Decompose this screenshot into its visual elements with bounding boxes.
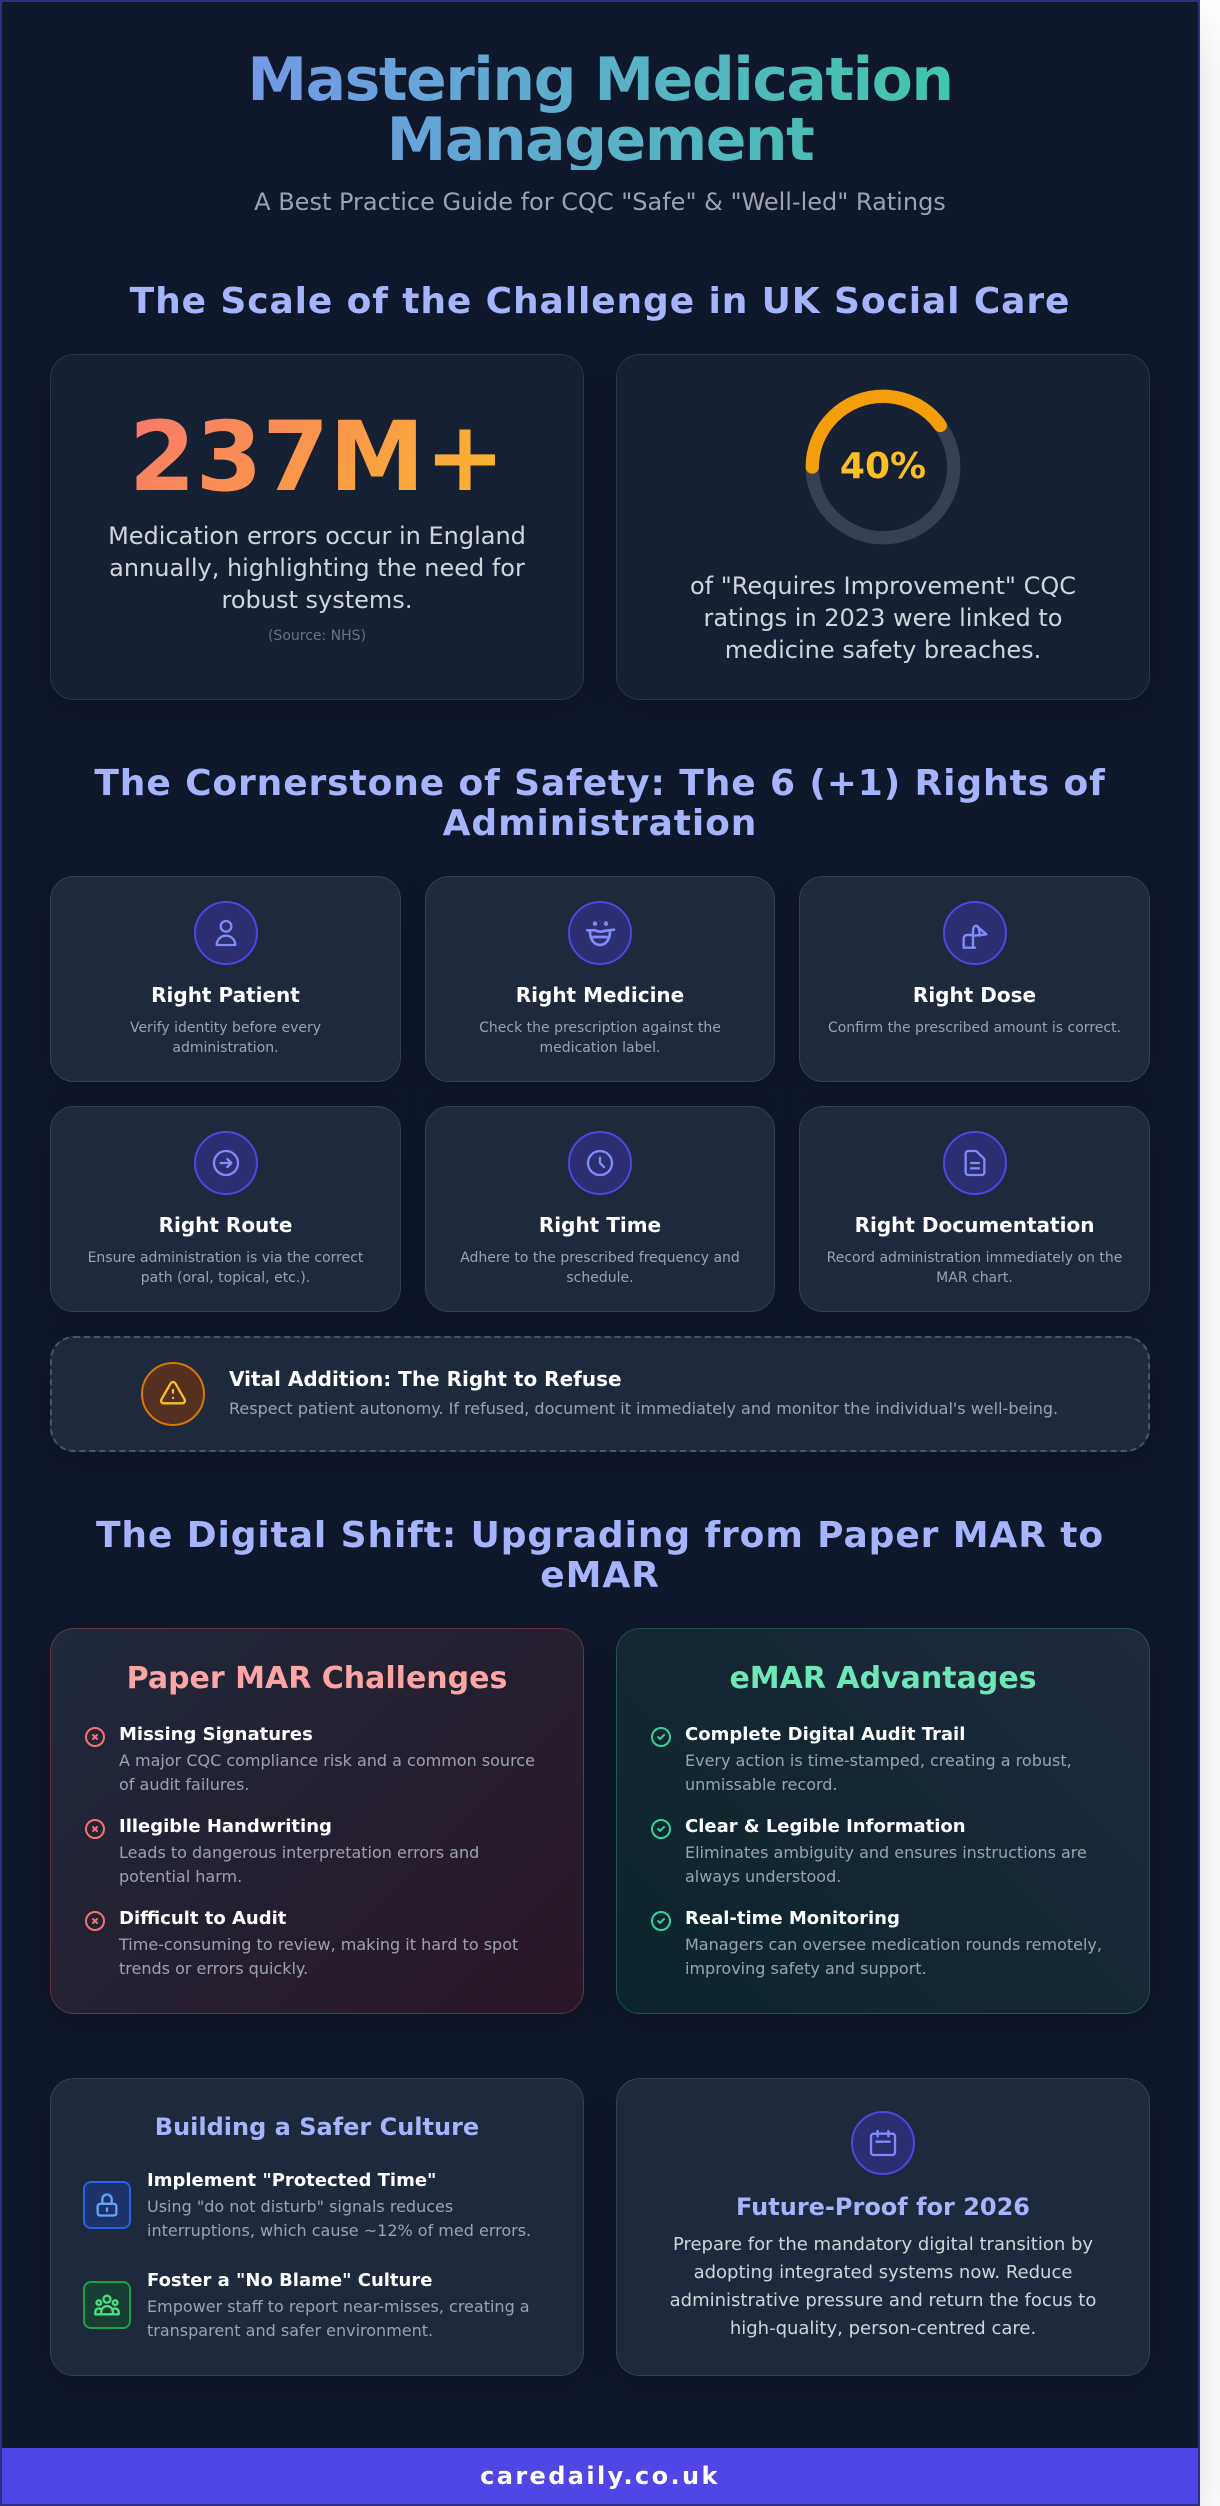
item: difficult to audit <box>85 1908 518 1978</box>
heading: scale of the challenge: The Scale of the Challenge in UK Social Care <box>130 281 1070 322</box>
title: Management <box>387 105 813 175</box>
panel: 237M+ statistic <box>50 354 584 700</box>
stat description: Medication errors occur in England annually, highlighting the need for robust systems. <box>108 522 526 614</box>
panel heading: Paper MAR Challenges <box>127 1661 507 1696</box>
callout: right to refuse <box>50 1336 1150 1452</box>
icon: lock <box>83 2181 131 2229</box>
item: no blame culture: Foster a "No Blame" Culture <box>147 2270 432 2291</box>
stat description: of "Requires Improvement" CQC ratings in 2023 were linked to medicine safety breaches. <box>690 572 1076 664</box>
card: right medicine: Right Medicine <box>516 983 684 1007</box>
panel: safer culture <box>50 2078 584 2376</box>
card: right route <box>50 1106 401 1312</box>
donut chart 40% <box>806 390 960 544</box>
item: real-time monitoring <box>651 1908 1102 1978</box>
source: (Source: NHS) <box>268 628 366 644</box>
item: real-time monitoring: Real-time Monitoring <box>685 1908 900 1929</box>
icon: dose <box>942 901 1006 965</box>
panel: paper MAR challenges <box>50 1628 584 2014</box>
item: real-time monitoring: Managers can oversee medication rounds remotely, improving safety and support. <box>685 1935 1102 1978</box>
donut value: 40% <box>840 446 926 487</box>
panel: eMAR advantages <box>616 1628 1150 2014</box>
item: illegible handwriting: Leads to dangerous interpretation errors and potential harm. <box>119 1843 479 1886</box>
icon: people <box>83 2281 131 2329</box>
icon: arrow circle <box>194 1131 258 1195</box>
panel text: Prepare for the mandatory digital transition by adopting integrated systems now. Reduce administrative pressure and return the focus to high-quality, person-centred care. <box>670 2234 1096 2339</box>
card: right route: Right Route <box>159 1213 292 1237</box>
item: no blame culture <box>83 2270 530 2340</box>
card: right medicine: Check the prescription against the medication label. <box>479 1020 721 1056</box>
card: right time: Right Time <box>539 1213 661 1237</box>
card: right documentation: Right Documentation <box>855 1213 1094 1237</box>
title <box>50 50 1150 170</box>
big number: 237M+ <box>129 401 505 513</box>
card: right patient: Verify identity before every administration. <box>130 1020 321 1056</box>
icon: warning <box>141 1362 205 1426</box>
item: no blame culture: Empower staff to report near-misses, creating a transparent and safer environment. <box>147 2297 530 2340</box>
icon: person <box>194 901 258 965</box>
heading: six rights: The Cornerstone of Safety: The 6 (+1) Rights of Administration <box>94 763 1106 844</box>
card: right documentation <box>799 1106 1150 1312</box>
card: right documentation: Record administration immediately on the MAR chart. <box>827 1250 1122 1286</box>
item: missing signatures: Missing Signatures <box>119 1724 313 1745</box>
item: audit trail <box>651 1724 1072 1794</box>
item: audit trail: Complete Digital Audit Trail <box>685 1724 965 1745</box>
panel: 40% statistic <box>616 354 1150 700</box>
callout title: Vital Addition: The Right to Refuse <box>229 1367 622 1391</box>
item: legible information: Eliminates ambiguity and ensures instructions are always understood. <box>685 1843 1087 1886</box>
item: illegible handwriting: Illegible Handwriting <box>119 1816 332 1837</box>
item: difficult to audit: Time-consuming to review, making it hard to spot trends or errors quickly. <box>119 1935 518 1978</box>
item: legible information: Clear & Legible Information <box>685 1816 966 1837</box>
item: protected time: Implement "Protected Time" <box>147 2170 436 2191</box>
footer <box>2 2448 1198 2504</box>
item: protected time: Using "do not disturb" signals reduces interruptions, which cause ~12% of med errors. <box>147 2197 531 2240</box>
card: right dose: Confirm the prescribed amount is correct. <box>828 1020 1121 1036</box>
callout text: Respect patient autonomy. If refused, document it immediately and monitor the individual's well-being. <box>229 1399 1058 1418</box>
icon: clock <box>568 1131 632 1195</box>
card: right dose: Right Dose <box>913 983 1036 1007</box>
card: right medicine <box>425 876 775 1082</box>
panel: future-proof <box>616 2078 1150 2376</box>
item: illegible handwriting <box>85 1816 479 1886</box>
item: missing signatures <box>85 1724 535 1794</box>
panel heading: Future-Proof for 2026 <box>736 2193 1030 2221</box>
icon: document <box>942 1131 1006 1195</box>
item: protected time <box>83 2170 531 2240</box>
panel heading: Building a Safer Culture <box>155 2113 479 2141</box>
subtitle: A Best Practice Guide for CQC "Safe" & "Well-led" Ratings <box>254 188 946 216</box>
card: right time: Adhere to the prescribed frequency and schedule. <box>460 1250 740 1286</box>
icon: calendar <box>851 2111 915 2175</box>
title: Mastering Medication <box>247 45 953 115</box>
card: right dose <box>799 876 1150 1082</box>
card: right route: Ensure administration is via the correct path (oral, topical, etc.). <box>88 1250 363 1286</box>
item: legible information <box>651 1816 1087 1886</box>
item: difficult to audit: Difficult to Audit <box>119 1908 286 1929</box>
icon: medicine <box>568 901 632 965</box>
card: right patient: Right Patient <box>151 983 300 1007</box>
item: missing signatures: A major CQC compliance risk and a common source of audit failures. <box>119 1751 535 1794</box>
card: right time <box>425 1106 775 1312</box>
panel heading: eMAR Advantages <box>729 1661 1037 1696</box>
heading: digital shift: The Digital Shift: Upgrading from Paper MAR to eMAR <box>96 1515 1104 1596</box>
footer: caredaily.co.uk <box>480 2462 720 2490</box>
card: right patient <box>50 876 401 1082</box>
item: audit trail: Every action is time-stamped, creating a robust, unmissable record. <box>685 1751 1072 1794</box>
